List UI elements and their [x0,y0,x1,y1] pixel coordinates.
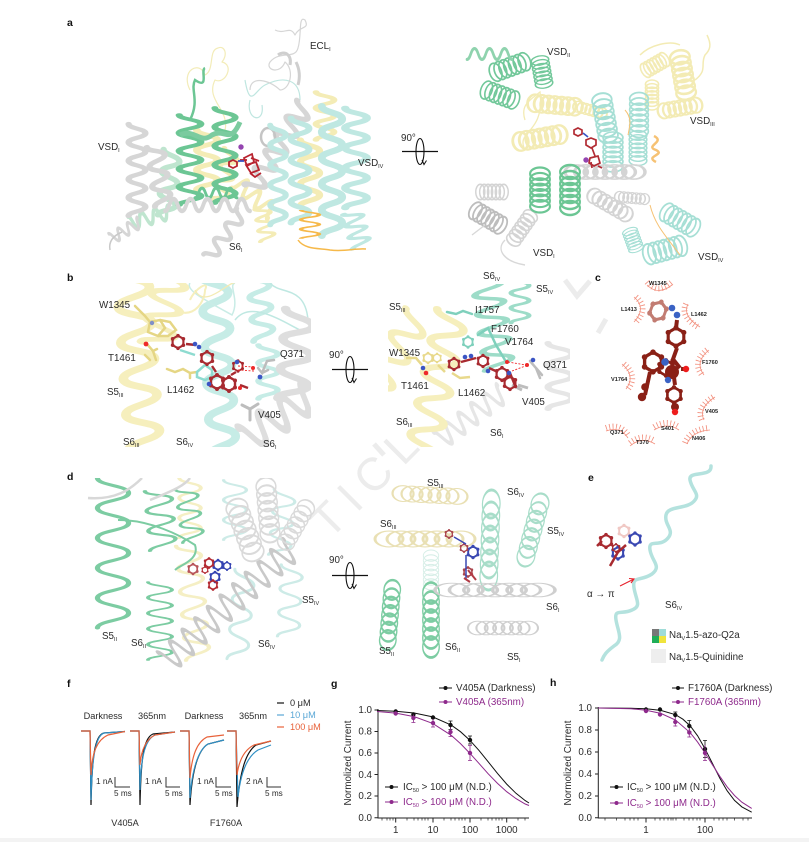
ligand [229,154,261,177]
labels: II [114,637,118,643]
structure: light green domain [128,149,180,229]
panel a: top view of channel: III [710,122,715,128]
panel c: ligand interaction plot: T370 [636,440,649,446]
legend: Na [669,652,682,663]
panel d: right view: II [391,652,395,658]
panel h: dose response F1760A: IC [627,798,637,809]
panel c: ligand interaction plot: L1462 [691,312,707,318]
panel letter a: a [67,17,73,29]
helices clipped [114,283,311,447]
panel b: right view: S6 [490,428,502,439]
panel d: right view: I [519,658,521,664]
panel g: dose response V405A: IC [403,782,413,793]
panel h: dose response F1760A: 1.0 [578,703,593,714]
label S6IV: IV [677,606,683,612]
data points purple [644,709,707,760]
panel letter h: h [550,677,556,689]
labels: VSD [547,47,567,58]
panel d: right view: II [457,648,461,654]
panel g: dose response V405A: 1000 [496,825,518,836]
panel b: left view [67,269,318,455]
panel b: left view: V405 [258,410,281,421]
panel h: dose response F1760A: > 100 μM (N.D.) [643,782,716,793]
panel b: left view: III [135,443,140,449]
panel b: right view: S5 [536,284,548,295]
panel b: right view: I [502,434,504,440]
panel h: dose response F1760A: 1 [643,825,649,836]
panel a: top view of channel: VSD [533,248,553,259]
axes [374,709,529,822]
panel d: left view: S6 [131,638,143,649]
panel h: dose response F1760A: F1760A (365nm) [688,697,761,708]
panel b: right view: V405 [522,397,545,408]
contact arcs [606,282,715,446]
panel d: left view [67,471,320,671]
panel f: current traces: 1 nA [197,777,214,786]
green helices [97,478,204,660]
structure: teal domain IV helices [270,106,370,249]
residue L1462 [167,369,197,378]
residue labels: W1345 [649,281,667,287]
panel letter d: d [67,471,73,483]
panel c: ligand interaction plot: V405 [705,409,718,415]
trace F1760A 365nm [227,731,271,807]
labels: IV [495,277,501,283]
panel h: dose response F1760A: 0.0 [578,813,593,824]
watermark: TICL [300,412,435,548]
helices clipped [388,284,570,447]
legend: 10 μM [290,710,316,720]
trace V405A darkness [81,731,125,805]
labels: W1345 [99,300,131,311]
watermark [300,280,606,548]
rotation symbol d: 90° [329,555,344,566]
condition titles: Darkness [185,711,224,721]
helix [602,466,711,660]
panel d: right view: S5 [547,526,559,537]
IC50 legend [610,786,623,788]
residue T1461 [145,344,157,360]
labels: II [567,53,571,59]
panel a: side view of channel: I [329,47,331,53]
panel g: dose response V405A: 0.2 [358,791,372,802]
panel b: right view: I1757 [475,305,500,316]
panel b: right view: L1462 [458,388,485,399]
panel a: top view of channel: IV [718,258,724,264]
panel d: left view: II [143,644,147,650]
panel h: dose response F1760A: 0.4 [578,769,593,780]
rotation symbol d [329,555,368,588]
panel d: right view: S5 [379,646,391,657]
panel e: S6IV helix kink [587,466,744,664]
panel a: top view of channel: VSD [698,252,718,263]
panel d: right view: S6 [507,487,519,498]
panel h: dose response F1760A: F1760A (Darkness) [688,683,772,694]
panel c: ligand interaction plot: V1764 [611,377,628,383]
labels: S5 [102,631,114,642]
panel b: right view: S6 [396,417,408,428]
labels: S5 [427,478,439,489]
panel b: right view: T1461 [401,381,429,392]
panel f: current traces: 5 ms [215,789,233,798]
structure: yellow domain III [197,92,334,242]
ligand model [638,296,689,415]
teal and green helices [479,490,551,590]
panel b: left view: Q371 [280,349,304,360]
panel g: dose response V405A: 0.6 [358,748,373,759]
legend [277,698,321,732]
panel a: top view of channel: VSD [690,116,710,127]
panel letter e: e [588,472,594,484]
data points black [644,708,707,758]
rotation symbol b [329,350,368,382]
panel b: left view: S6 [123,437,135,448]
yellow helices [375,485,475,547]
grey helices [435,583,555,635]
panel b: right view: S5 [389,302,401,313]
panel h: dose response F1760A: 50 [637,788,643,794]
panel b: left view: T1461 [108,353,136,364]
panel h: dose response F1760A: IC [627,782,637,793]
labels: I [118,148,120,154]
panel g: dose response V405A: 1 [393,825,398,836]
condition titles: 365nm [138,711,166,721]
legend: 1.5-azo-Q2a [685,630,740,641]
panel g: dose response V405A: 10 [428,825,439,836]
panel d: right view: III [392,525,397,531]
panel c: ligand interaction plot: Q371 [610,430,624,436]
panel g: dose response V405A: V405A (365nm) [456,697,524,708]
panel b: left view: S5 [107,387,119,398]
structure: green domain II helices [179,108,237,205]
panel b: left view: L1462 [167,385,194,396]
data points black [394,710,472,744]
residue W1345 [135,306,176,336]
panel h: dose response F1760A: > 100 μM (N.D.) [643,798,716,809]
panel d: right view: I [558,608,560,614]
panel letter b: b [67,272,73,284]
panel h: dose response F1760A [550,677,772,836]
legend top [672,687,684,689]
panel a: side view of channel [67,17,384,262]
panel g: dose response V405A: > 100 μM (N.D.) [419,797,492,808]
panel b: left view: S6 [176,437,188,448]
legend: V [682,636,686,642]
panel b: left view: IV [188,443,194,449]
condition titles: 365nm [239,711,267,721]
orange linker [625,110,680,255]
yellow coils [511,49,703,152]
panel f: current traces [67,678,321,828]
panel g: dose response V405A: 0.0 [358,813,373,824]
panel h: dose response F1760A: 50 [637,804,643,810]
y axis title: Normolized Current [563,720,574,805]
panel c: ligand interaction plot: N406 [692,436,705,442]
panel g: dose response V405A: 50 [413,803,419,809]
panel g: dose response V405A: 1.0 [358,705,373,716]
rotation symbol a: 90° [401,133,416,144]
teal coils [591,92,703,266]
alpha to pi text: α → π [587,589,615,600]
data points purple [394,712,472,760]
green coils foreground [530,165,580,215]
panel d: right view: S6 [546,602,558,613]
panel b: left view: III [119,393,124,399]
panel d: left view: IV [314,601,320,607]
fit curves [377,710,529,803]
panel h: dose response F1760A: 100 [697,825,714,836]
structure: orange linker [298,210,366,251]
panel b: right view [388,272,570,447]
red arrow [620,578,634,586]
teal residues [447,311,505,360]
panel g: dose response V405A: 50 [413,788,419,794]
panel b: right view: W1345 [389,348,421,359]
labels: S6 [483,271,495,282]
legend: Na [669,630,682,641]
panel g: dose response V405A: IC [403,797,413,808]
ion [583,157,589,163]
labels: III [439,484,444,490]
legend [651,629,744,664]
panel a: top view of channel [466,35,724,266]
panel d: right view [375,478,565,664]
trace F1760A darkness [180,731,224,805]
structure: grey domain I helices [109,100,313,262]
teal residues [180,350,212,380]
panel a: side view of channel: S6 [229,242,241,253]
panel letter c: c [595,272,601,284]
grey coils [466,165,650,249]
condition titles [84,711,267,721]
y axis title: Normolized Current [343,720,354,805]
panel d: right view: S6 [380,519,392,530]
panel a: top view of channel: I [553,254,555,260]
scale bars [115,777,281,787]
panel d: left view: S6 [258,639,270,650]
panel b: right view: F1760 [491,324,519,335]
panel letter f: f [67,678,71,690]
panel d: right view: IV [519,493,525,499]
legend: V [682,658,686,664]
panel d: left view: IV [270,645,276,651]
green coils [478,51,553,111]
panel f: current traces: 2 nA [246,777,263,786]
legend: 100 μM [290,722,321,732]
IC50 legend [385,786,398,788]
panel b: left view: I [275,445,277,451]
ligand overlay [187,557,231,591]
panel h: dose response F1760A: 0.8 [578,725,593,736]
V405 residue [512,385,528,390]
panel b: right view: Q371 [543,360,567,371]
panel g: dose response V405A: > 100 μM (N.D.) [419,782,492,793]
yellow residues [406,352,470,378]
panel f: current traces: 5 ms [114,789,132,798]
ligand overlay [597,524,642,566]
legend top [439,687,452,689]
panel a: side view of channel: I [241,248,243,254]
panel g: dose response V405A: V405A (Darkness) [456,683,536,694]
rotation symbol a [401,133,438,164]
panel g: dose response V405A [331,678,536,836]
ligand [448,354,517,391]
Q371 residue [530,361,542,378]
residue V405 [242,404,258,420]
panel b: right view: V1764 [505,337,534,348]
panel f: current traces: 5 ms [265,789,283,798]
labels: VSD [98,142,118,153]
pale helices [176,478,210,661]
panel g: dose response V405A: 100 [462,825,479,836]
panel h: dose response F1760A: 0.6 [578,747,593,758]
panel b: right view: III [401,308,406,314]
label S6IV: S6 [665,600,677,611]
rotation symbol b: 90° [329,350,344,361]
panel c: ligand interaction plot: S401 [661,426,674,432]
panel a: side view of channel: ECL [310,41,329,52]
trace V405A 365nm [130,731,175,805]
panel a: side view of channel: IV [378,164,384,170]
panel f: current traces: 5 ms [165,789,183,798]
fit curves [598,708,752,812]
panel d: left view: S5 [302,595,314,606]
legend: 0 μM [290,698,311,708]
panel d: right view: IV [559,532,565,538]
panel b: right view: IV [548,290,554,296]
grey helices [158,539,300,671]
panel f: current traces: 1 nA [96,777,113,786]
panel c: ligand interaction plot: L1413 [621,307,637,313]
panel g: dose response V405A: 0.8 [358,726,373,738]
panel a: side view of channel: VSD [358,158,378,169]
structure: extracellular loops [187,19,306,130]
axes [595,707,752,822]
panel d: right view: S5 [507,652,519,663]
background strip [0,838,809,842]
panel letter g: g [331,678,337,690]
legend: 1.5-Quinidine [685,652,744,663]
panel b: left view: S6 [263,439,275,450]
panel f: current traces: 1 nA [145,777,162,786]
panel h: dose response F1760A: 0.2 [578,791,592,802]
ligand [574,128,602,168]
panel f: current traces: F1760A [210,818,243,828]
panel d: right view: S6 [445,642,457,653]
condition titles: Darkness [84,711,123,721]
panel g: dose response V405A: 0.4 [358,770,373,781]
panel c: ligand interaction plot: F1760 [702,360,718,366]
panel b: right view: III [408,423,413,429]
purple ion [238,144,244,150]
residue Q371 [258,360,274,373]
ligand overlay [445,529,479,582]
panel c: ligand interaction plot [595,272,718,446]
ligand [171,334,248,393]
mutant labels: V405A [111,818,140,828]
